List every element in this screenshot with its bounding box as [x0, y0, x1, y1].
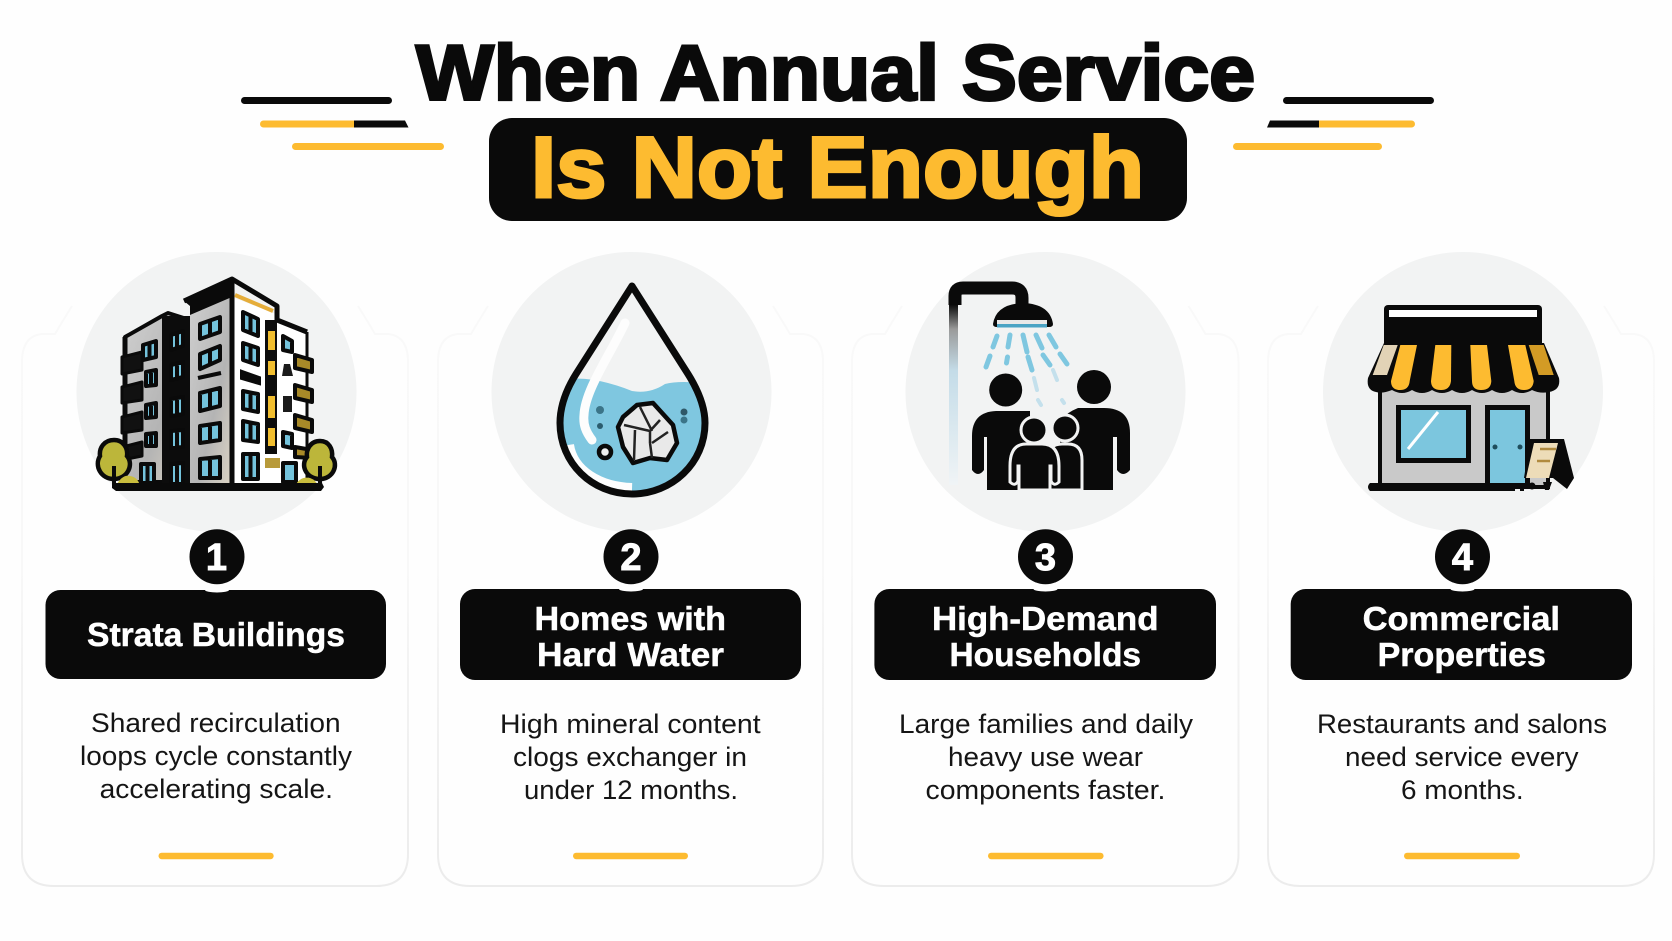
- heading bar: Properties: [1378, 636, 1546, 673]
- heading bar: High-Demand: [932, 600, 1158, 637]
- heading bar: [874, 586, 1216, 680]
- heading bar: Strata Buildings: [87, 616, 345, 653]
- description text: [1317, 709, 1607, 805]
- yellow accent bar: [1404, 853, 1520, 859]
- yellow accent bar: [988, 853, 1104, 859]
- description text: High mineral content: [500, 709, 761, 739]
- description text: need service every: [1345, 742, 1579, 772]
- icon: storefront: [1368, 305, 1574, 491]
- description text: loops cycle constantly: [80, 741, 353, 771]
- awning: [1368, 343, 1559, 393]
- card outline: [852, 306, 1238, 886]
- card outline: [438, 306, 823, 886]
- icon circle: [906, 252, 1186, 532]
- a-frame sign: [1524, 439, 1574, 489]
- description text: under 12 months.: [524, 775, 738, 805]
- heading bar: Homes with: [534, 600, 726, 637]
- icon circle: [492, 252, 772, 532]
- icon circle: [1323, 252, 1603, 532]
- heading bar: Commercial: [1363, 600, 1560, 637]
- right speed lines: [1233, 97, 1434, 150]
- number badge 3: 3: [1035, 537, 1056, 579]
- title: [416, 28, 1255, 221]
- yellow window strip: [265, 320, 277, 454]
- description text: Shared recirculation: [91, 708, 341, 738]
- balconies: [122, 352, 142, 460]
- description text: [899, 709, 1194, 805]
- number badge 2: [604, 529, 658, 584]
- yellow accent bar: [158, 853, 274, 859]
- number badge 3: [1018, 529, 1073, 584]
- description text: 6 months.: [1401, 775, 1524, 805]
- door: [1488, 408, 1528, 486]
- ground: [1368, 483, 1515, 491]
- trees and ground: [98, 440, 130, 479]
- title line: When Annual Service: When Annual Service: [416, 28, 1255, 116]
- description text: Large families and daily: [899, 709, 1194, 739]
- number badge 4: 4: [1452, 537, 1473, 579]
- icon: shower and family: [949, 288, 1130, 490]
- card outline: [22, 306, 408, 886]
- panel: homes with hard water: [438, 252, 823, 886]
- heading bar: Hard Water: [537, 636, 724, 673]
- description text: heavy use wear: [948, 742, 1143, 772]
- number badge 1: [190, 529, 244, 584]
- description text: clogs exchanger in: [513, 742, 747, 772]
- title pill: Is Not Enough: Is Not Enough: [531, 120, 1144, 216]
- wall: [1380, 385, 1548, 487]
- panel: high-demand households: [852, 252, 1238, 886]
- water drops: [986, 335, 1067, 370]
- shop window: [1398, 408, 1468, 460]
- sign board: [1384, 305, 1542, 349]
- panel: commercial properties: [1268, 252, 1654, 886]
- number badge 2: 2: [620, 537, 642, 579]
- left adult: [972, 374, 1030, 490]
- heading bar: [46, 588, 386, 679]
- yellow accent bar: [573, 853, 688, 859]
- icon circle: [76, 252, 356, 532]
- panel: strata buildings: [22, 252, 408, 886]
- number badge 4: [1435, 529, 1490, 584]
- card outline: [1268, 306, 1654, 886]
- right adult: [1060, 370, 1130, 490]
- icon: water drop with mineral rock: [555, 286, 712, 500]
- rock: [618, 403, 677, 463]
- heading bar: Households: [950, 636, 1141, 673]
- description text: accelerating scale.: [100, 774, 333, 804]
- heading bar: [1291, 586, 1632, 680]
- heading bar: [460, 586, 801, 680]
- description text: components faster.: [926, 775, 1165, 805]
- description text: Restaurants and salons: [1317, 709, 1607, 739]
- icon: apartment building: [98, 279, 335, 491]
- shower pipe: [949, 295, 958, 485]
- right child: [1048, 415, 1082, 490]
- left speed lines: [241, 97, 444, 150]
- windows: [141, 312, 296, 484]
- description text: [80, 708, 353, 804]
- number badge 1: 1: [206, 537, 227, 579]
- description text: [500, 709, 761, 805]
- left child: [1010, 417, 1059, 490]
- shower head: [993, 303, 1053, 327]
